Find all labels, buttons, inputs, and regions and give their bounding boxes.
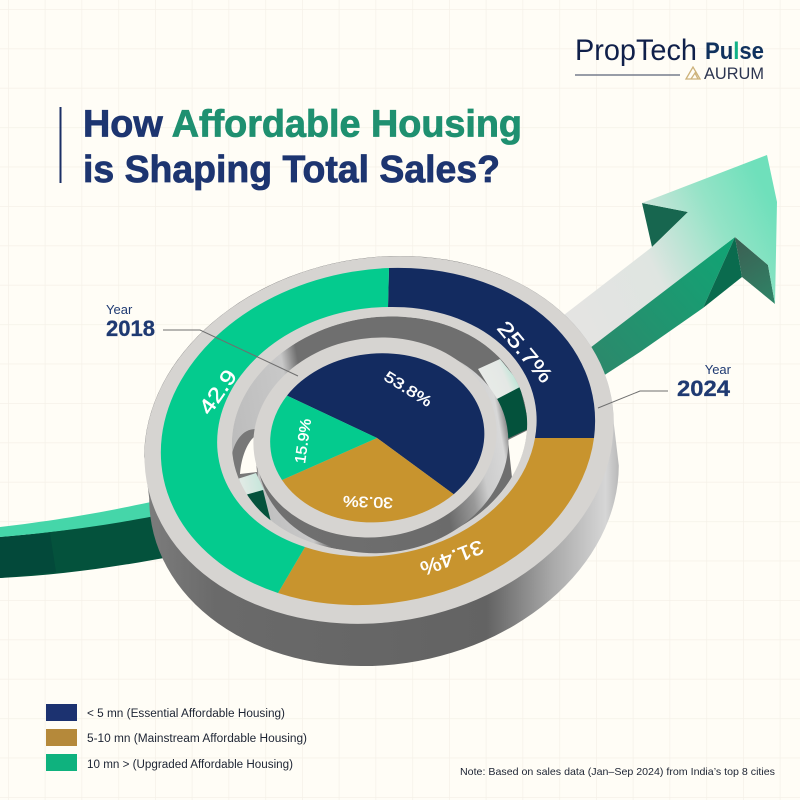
- outer ring: hole with far wall and arrow passing through: [232, 316, 528, 550]
- legend item: over 10 mn: 10 mn > (Upgraded Affordable Housing): [87, 759, 293, 771]
- logo: PropTech Pulse by Aurum: Pulse: [705, 38, 764, 65]
- legend item: 5-10 mn: [46, 729, 307, 746]
- inner disc: extruded side: [241, 324, 525, 573]
- inner pie chart: year 2018: [270, 353, 484, 522]
- arrow: rising arrow head and shaft: [555, 155, 777, 386]
- segment: over 10 mn 42.9: [161, 268, 389, 593]
- inner disc: top face: [240, 322, 510, 553]
- value labels on the charts: 25.7%: [492, 317, 557, 388]
- title: is Shaping Total Sales?: [83, 149, 500, 191]
- value labels on the charts: 42.9: [195, 366, 242, 419]
- outer ring chart: year 2024: [161, 268, 595, 605]
- callout: year 2024: [598, 362, 732, 408]
- value labels on the charts: [195, 317, 557, 579]
- value labels on the charts: 15.9%: [292, 418, 315, 465]
- segment: over 10 mn 15.9%: [270, 396, 377, 480]
- legend item: under 5 mn: [46, 704, 285, 721]
- value labels on the charts: 53.8%: [381, 368, 435, 411]
- footnote: Note: Based on sales data (Jan–Sep 2024) from India’s top 8 cities: [460, 766, 775, 778]
- title: [83, 104, 522, 191]
- callout: year 2018: 2018: [106, 316, 155, 341]
- callout: year 2018: [106, 302, 298, 376]
- 3D disc: outer top face: [115, 220, 643, 660]
- segment: 5-10 mn 30.3%: [282, 438, 454, 522]
- segment: under 5 mn 25.7%: [388, 268, 595, 438]
- segment: under 5 mn 53.8%: [287, 353, 484, 494]
- value labels on the charts: 30.3%: [343, 492, 393, 511]
- title accent bar: [60, 107, 62, 183]
- callout: year 2018: Year: [106, 302, 133, 317]
- logo: PropTech Pulse by Aurum: PropTech: [575, 34, 697, 67]
- arrow: left tail: [0, 500, 175, 578]
- legend item: 5-10 mn: 5-10 mn (Mainstream Affordable Housing): [87, 733, 307, 745]
- segment: 5-10 mn 31.4%: [278, 438, 594, 605]
- callout: year 2024: 2024: [677, 376, 731, 401]
- 3D disc: outer extruded side: [144, 256, 619, 666]
- legend item: over 10 mn: [46, 754, 293, 771]
- logo: PropTech Pulse by Aurum: AURUM: [704, 64, 764, 83]
- legend: [46, 704, 307, 771]
- legend item: under 5 mn: < 5 mn (Essential Affordable Housing): [87, 708, 285, 720]
- logo: PropTech Pulse by Aurum: [575, 34, 764, 83]
- callout: year 2024: Year: [705, 362, 732, 377]
- value labels on the charts: 31.4%: [417, 535, 486, 579]
- title: How Affordable Housing: [83, 104, 522, 146]
